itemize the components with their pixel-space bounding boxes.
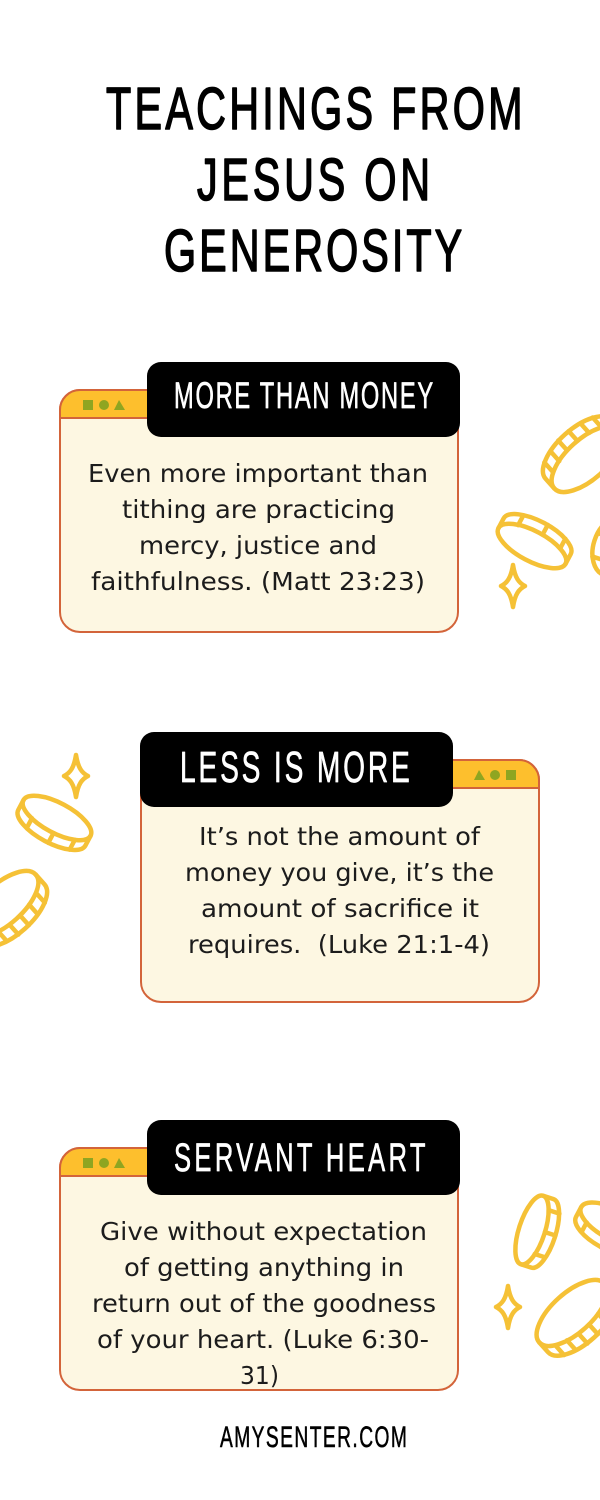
text block: servant heart: Give without expectation	[100, 1217, 427, 1246]
text block: more than money: mercy, justice and	[139, 531, 377, 560]
text block: servant heart: 31)	[240, 1361, 279, 1390]
footer website: AMYSENTER.COM	[220, 1421, 407, 1454]
text block: less is more: requires. (Luke 21:1-4)	[188, 930, 490, 959]
text block: less is more: amount of sacrifice it	[201, 894, 479, 923]
title: JESUS ON	[197, 147, 430, 213]
icon: coin lower right large	[526, 1269, 600, 1367]
card window	[60, 1148, 458, 1390]
card window	[60, 390, 458, 632]
text block: less is more: money you give, it’s the	[185, 858, 494, 887]
heading: more than money: MORE THAN MONEY	[174, 375, 433, 416]
icon: coin left lower	[0, 860, 58, 958]
heading: servant heart: SERVANT HEART	[174, 1136, 426, 1181]
text block: more than money: Even more important than	[88, 459, 428, 488]
title	[106, 76, 522, 284]
panel: less is more	[140, 732, 539, 1002]
window control icons	[474, 770, 516, 780]
heading: more than money	[147, 362, 460, 437]
panel: servant heart	[60, 1120, 460, 1390]
text block: servant heart	[92, 1217, 436, 1390]
window control icons	[83, 400, 125, 410]
heading: less is more: LESS IS MORE	[180, 743, 410, 792]
card window	[141, 760, 539, 1002]
title: TEACHINGS FROM	[106, 76, 522, 142]
icon: sparkle lower right	[496, 1286, 520, 1328]
heading: servant heart	[147, 1120, 460, 1195]
text block: more than money: faithfulness. (Matt 23:23)	[91, 567, 425, 596]
text block: less is more: It’s not the amount of	[199, 822, 481, 851]
text block: servant heart: of your heart. (Luke 6:30-	[97, 1325, 429, 1354]
icon: coin lower right edge	[569, 1194, 600, 1264]
icon: sparkle left	[64, 755, 88, 797]
icon: coin top right	[532, 405, 600, 503]
icon: coin right edge	[585, 512, 600, 585]
icon: coin left upper	[11, 787, 98, 859]
heading: less is more	[140, 732, 453, 807]
text block: servant heart: return out of the goodness	[92, 1289, 436, 1318]
icon: coin middle right	[491, 505, 578, 577]
icon: sparkle top right	[501, 565, 525, 607]
text block: more than money	[88, 459, 428, 596]
icon: coin lower right upper	[509, 1192, 566, 1272]
window control icons	[83, 1158, 125, 1168]
text block: less is more	[185, 822, 494, 959]
panel: more than money	[60, 362, 460, 632]
title: GENEROSITY	[164, 218, 462, 284]
text block: more than money: tithing are practicing	[122, 495, 395, 524]
text block: servant heart: of getting anything in	[124, 1253, 404, 1282]
